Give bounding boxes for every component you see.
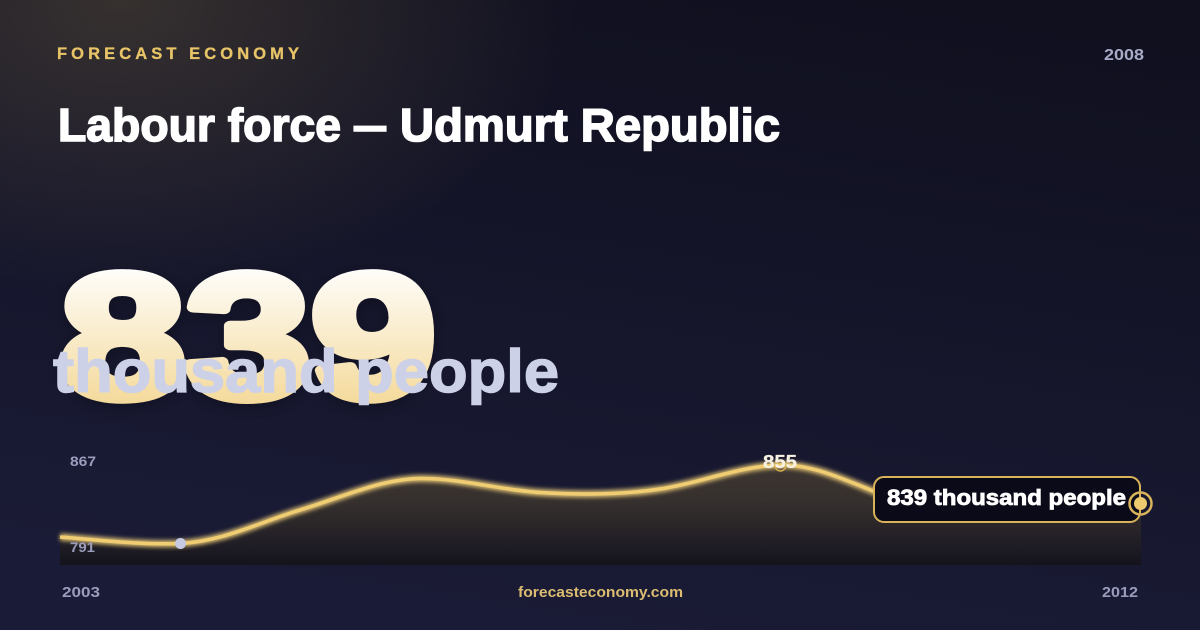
peak point marker: [775, 460, 786, 471]
website label: forecasteconomy.com: [518, 584, 683, 601]
axis max label: 867: [70, 453, 96, 469]
value callout: 839 thousand people: [887, 485, 1126, 510]
year label top right: 2008: [1104, 47, 1144, 64]
title: [58, 99, 780, 151]
end year label: 2012: [1102, 584, 1138, 601]
trend line: [60, 465, 900, 544]
title: Labour force: [58, 99, 341, 151]
minimum point marker: [175, 538, 186, 549]
brand label: FORECAST ECONOMY: [57, 45, 299, 63]
line glow: [60, 465, 900, 544]
line chart: [60, 452, 1152, 565]
end point marker: [1130, 492, 1152, 514]
start year label: 2003: [62, 584, 100, 601]
peak value label: 855: [763, 452, 797, 472]
unit label: thousand people: [53, 338, 559, 405]
big number: 839: [60, 239, 436, 435]
title: Udmurt Republic: [400, 99, 780, 151]
title: —: [354, 99, 386, 151]
chart area fill: [60, 465, 1141, 565]
axis min label: 791: [70, 539, 95, 555]
value callout: [874, 477, 1140, 522]
